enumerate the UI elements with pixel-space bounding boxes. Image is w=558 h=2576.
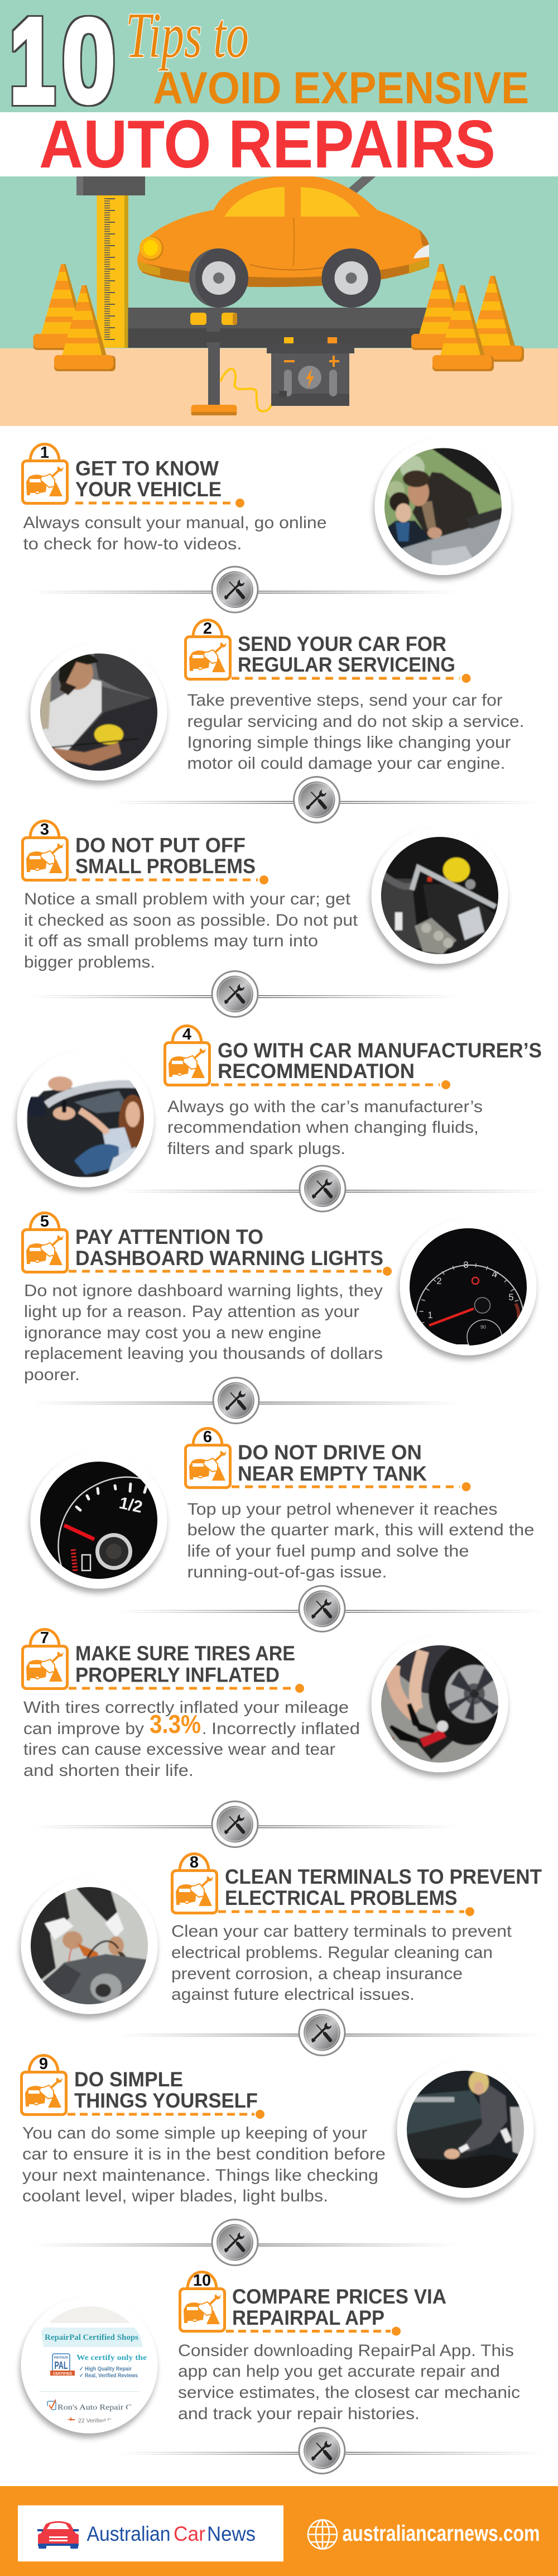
heading 2: SEND YOUR CAR FOR <box>238 633 446 655</box>
heading 5: PAY ATTENTION TO <box>75 1225 263 1248</box>
dashed rule 1 <box>75 499 244 507</box>
logo wordmark <box>87 2522 256 2545</box>
photo: key handover in car <box>17 1051 154 1187</box>
divider 9 <box>32 2220 458 2266</box>
heading 3: SMALL PROBLEMS <box>75 855 256 878</box>
body 8: electrical problems. Regular cleaning can <box>171 1943 493 1962</box>
logo wordmark: Australian <box>87 2522 171 2545</box>
body 1: Always consult your manual, go online <box>23 514 327 532</box>
heading 9 <box>74 2068 258 2112</box>
divider 10 <box>119 2427 545 2473</box>
title: 10 <box>10 0 116 128</box>
photo: tachometer: 5 <box>508 1292 514 1303</box>
heading 3 <box>75 834 256 878</box>
divider 8 <box>119 2010 545 2056</box>
tip 10 <box>21 2272 520 2433</box>
body 6: running-out-of-gas issue. <box>187 1563 387 1581</box>
dashed rule 9 <box>68 2110 264 2119</box>
icon: wrench behind car <box>350 173 373 193</box>
photo: RepairPal certified shops screenshot: Ron's Auto Repair C <box>57 2403 132 2412</box>
battery <box>267 337 354 406</box>
photo: tachometer: 4 <box>492 1269 497 1280</box>
photo: mechanic checking oil <box>30 644 167 781</box>
badge 4 <box>165 1026 210 1085</box>
title: Avoid Expensive: AVOID EXPENSIVE <box>153 63 529 113</box>
photo: RepairPal certified shops screenshot: ✓ Real, Verified Reviews <box>79 2373 138 2379</box>
heading 1: GET TO KNOW <box>75 457 219 480</box>
heading 10 <box>232 2285 446 2329</box>
divider 5 <box>33 1378 459 1424</box>
badge 10 <box>180 2272 224 2331</box>
body 2 <box>187 691 525 773</box>
body 3: bigger problems. <box>24 953 155 971</box>
photo: RepairPal certified shops screenshot: 22 Verified R <box>78 2418 112 2424</box>
heading 6 <box>238 1441 427 1485</box>
divider 4 <box>119 1166 545 1212</box>
photo: inflating tire <box>372 1636 509 1772</box>
photo: tachometer: 90 <box>480 1324 486 1330</box>
dashed rule 3 <box>69 875 268 884</box>
heading 7: MAKE SURE TIRES ARE <box>75 1642 295 1665</box>
body 9: car to ensure it is in the best condition before <box>22 2145 386 2163</box>
body 8: against future electrical issues. <box>171 1985 415 2004</box>
badge 10: 10 <box>193 2272 211 2290</box>
heading 5 <box>75 1225 383 1270</box>
dashed rule 4 <box>211 1080 450 1089</box>
photo: RepairPal certified shops screenshot: RepairPal Certified Shops <box>45 2333 138 2342</box>
divider 6 <box>119 1586 545 1631</box>
tip 9 <box>21 2055 533 2205</box>
heading 6: DO NOT DRIVE ON <box>238 1441 422 1464</box>
logo wordmark: News <box>207 2522 256 2545</box>
tip 2 <box>30 620 525 781</box>
headlight <box>140 236 163 261</box>
body 6: life of your fuel pump and solve the <box>187 1542 469 1560</box>
heading 8 <box>225 1865 542 1909</box>
body 2: Ignoring simple things like changing your <box>187 734 511 751</box>
body 7 <box>23 1698 360 1780</box>
heading 4 <box>218 1039 542 1083</box>
body 5: replacement leaving you thousands of dollars <box>24 1344 383 1363</box>
badge 2: 2 <box>203 620 212 638</box>
footer <box>0 2486 558 2576</box>
body 3: it off as small problems may turn into <box>24 932 318 950</box>
badge 9 <box>21 2055 66 2115</box>
tip 8 <box>21 1854 542 2014</box>
photo: RepairPal certified shops screenshot: ✓ High Quality Repair <box>79 2366 132 2372</box>
body 9: You can do some simple up keeping of your <box>22 2124 367 2143</box>
body 4: recommendation when changing fluids, <box>167 1118 479 1137</box>
header background <box>0 0 558 112</box>
title banner <box>0 112 558 176</box>
body 7: Incorrectly inflated <box>211 1720 360 1738</box>
tip 7 <box>22 1629 509 1780</box>
badge 2 <box>185 620 230 679</box>
photo: tachometer: 2 <box>436 1276 442 1286</box>
dashed rule 2 <box>232 674 471 683</box>
body 7: can improve by <box>23 1720 144 1738</box>
badge 8: 8 <box>190 1854 199 1871</box>
body 4: Always go with the car’s manufacturer’s <box>167 1098 483 1116</box>
cable <box>219 367 272 412</box>
body 6: below the quarter mark, this will extend the <box>187 1521 535 1539</box>
body 8 <box>171 1922 512 2004</box>
lift platform <box>128 308 427 348</box>
heading 8: CLEAN TERMINALS TO PREVENT <box>225 1865 542 1888</box>
tip 6 <box>30 1428 535 1589</box>
photo: RepairPal certified shops screenshot: PAL <box>55 2360 68 2371</box>
body 4 <box>167 1098 483 1158</box>
body 10: service estimates, the closest car mechanic <box>178 2383 520 2402</box>
title: Auto Repairs: AUTO REPAIRS <box>39 106 496 182</box>
heading 6: NEAR EMPTY TANK <box>238 1462 427 1485</box>
body 2: regular servicing and do not skip a service. <box>187 712 525 731</box>
heading 8: ELECTRICAL PROBLEMS <box>225 1886 458 1909</box>
heading 2: REGULAR SERVICEING <box>238 653 455 676</box>
car <box>137 175 429 308</box>
body 5: ignorance may cost you a new engine <box>24 1324 321 1342</box>
logo panel <box>18 2506 283 2561</box>
lift post <box>76 176 145 348</box>
photo: fuel gauge: 1/2 <box>118 1494 144 1517</box>
tip 5 <box>22 1213 537 1384</box>
body 3: it checked as soon as possible. Do not put <box>24 911 358 930</box>
heading 10: COMPARE PRICES VIA <box>232 2285 446 2308</box>
tip 3 <box>22 821 508 971</box>
photo: man and boy under hood <box>375 438 511 575</box>
badge 9: 9 <box>39 2055 48 2073</box>
body 3: Notice a small problem with your car; get <box>24 890 351 908</box>
photo: RepairPal certified shops screenshot <box>21 2297 157 2433</box>
dashed rule 8 <box>218 1907 474 1916</box>
badge 7 <box>22 1629 67 1688</box>
body 10: Consider downloading RepairPal App. This <box>178 2342 514 2360</box>
heading 7 <box>75 1642 295 1686</box>
heading 2 <box>238 633 455 676</box>
body 7: and shorten their life. <box>23 1761 194 1780</box>
body 1 <box>23 514 327 553</box>
body 3 <box>24 890 358 971</box>
body 2: Take preventive steps, send your car for <box>187 691 503 710</box>
photo: jumper cables <box>21 1877 157 2014</box>
badge 6 <box>185 1428 230 1487</box>
dashed rule 7 <box>69 1684 304 1693</box>
photo: RepairPal certified shops screenshot: REPAIR <box>54 2356 68 2360</box>
body 4: filters and spark plugs. <box>167 1139 345 1158</box>
icon: globe <box>308 2520 337 2549</box>
body 6: Top up your petrol whenever it reaches <box>187 1500 498 1519</box>
photo: engine bay <box>372 827 508 964</box>
heading 9: DO SIMPLE <box>74 2068 183 2091</box>
body 8: Clean your car battery terminals to prevent <box>171 1922 512 1941</box>
body 10 <box>178 2342 520 2423</box>
heading 10: REPAIRPAL APP <box>232 2306 384 2329</box>
badge 5: 5 <box>40 1213 49 1230</box>
heading 1 <box>75 457 222 501</box>
tip 1 <box>22 438 511 575</box>
body 10: app can help you get accurate repair and <box>178 2362 500 2381</box>
heading 3: DO NOT PUT OFF <box>75 834 246 857</box>
divider 1 <box>32 567 458 612</box>
jack <box>190 310 237 415</box>
body 7: . <box>202 1720 206 1738</box>
photo: RepairPal certified shops screenshot: We certify only the <box>76 2354 147 2362</box>
title: Tips to: Tips to <box>126 0 249 71</box>
logo wordmark: Car <box>174 2522 205 2545</box>
badge 1: 1 <box>40 444 49 462</box>
badge 8 <box>172 1854 217 1913</box>
photo: fuel gauge <box>30 1452 167 1589</box>
badge 7: 7 <box>40 1629 49 1647</box>
wheels <box>189 248 248 308</box>
badge 6: 6 <box>203 1428 212 1446</box>
dashed rule 10 <box>226 2327 401 2336</box>
traffic cones <box>33 264 524 371</box>
heading 7: PROPERLY INFLATED <box>75 1664 280 1686</box>
body 1: to check for how-to videos. <box>23 535 242 553</box>
body 5: Do not ignore dashboard warning lights, they <box>24 1282 383 1300</box>
body 7: With tires correctly inflated your mileage <box>23 1698 349 1717</box>
body 2: motor oil could damage your car engine. <box>187 754 506 773</box>
body 10: and track your repair histories. <box>178 2405 420 2423</box>
illustration: car on lift <box>0 173 558 426</box>
divider 3 <box>32 971 458 1017</box>
divider 7 <box>32 1801 458 1847</box>
badge 3 <box>22 821 67 880</box>
divider 2 <box>114 777 540 823</box>
body 9 <box>22 2124 386 2205</box>
body 7: tires can cause excessive wear and tear <box>23 1740 335 1759</box>
callout: 3.3%: 3.3% <box>150 1710 201 1739</box>
body 8: prevent corrosion, a cheap insurance <box>171 1965 463 1983</box>
photo: tachometer <box>400 1218 537 1356</box>
body 9: coolant level, wiper blades, light bulbs. <box>22 2187 328 2205</box>
photo: tachometer: 3 <box>463 1260 469 1270</box>
heading 5: DASHBOARD WARNING LIGHTS <box>75 1247 383 1270</box>
photo: RepairPal certified shops screenshot: CERTIFIED <box>53 2372 72 2376</box>
icon: car logo <box>37 2521 79 2549</box>
badge 3: 3 <box>40 821 49 839</box>
photo: woman checking engine <box>397 2061 533 2197</box>
heading 4: RECOMMENDATION <box>218 1060 415 1083</box>
dashed rule 6 <box>232 1482 471 1491</box>
badge 4: 4 <box>182 1026 191 1043</box>
body 5 <box>24 1282 383 1384</box>
heading 1: YOUR VEHICLE <box>75 478 222 501</box>
body 5: light up for a reason. Pay attention as your <box>24 1303 359 1321</box>
body 6 <box>187 1500 535 1581</box>
tip 4 <box>17 1026 542 1187</box>
photo: tachometer: 1 <box>427 1310 433 1320</box>
body 5: poorer. <box>24 1366 80 1384</box>
badge 1 <box>22 444 67 504</box>
heading 4: GO WITH CAR MANUFACTURER’S <box>218 1039 542 1062</box>
heading 9: THINGS YOURSELF <box>74 2089 258 2112</box>
badge 5 <box>22 1213 67 1272</box>
dashed rule 5 <box>69 1267 392 1276</box>
body 9: your next maintenance. Things like checking <box>22 2166 378 2185</box>
